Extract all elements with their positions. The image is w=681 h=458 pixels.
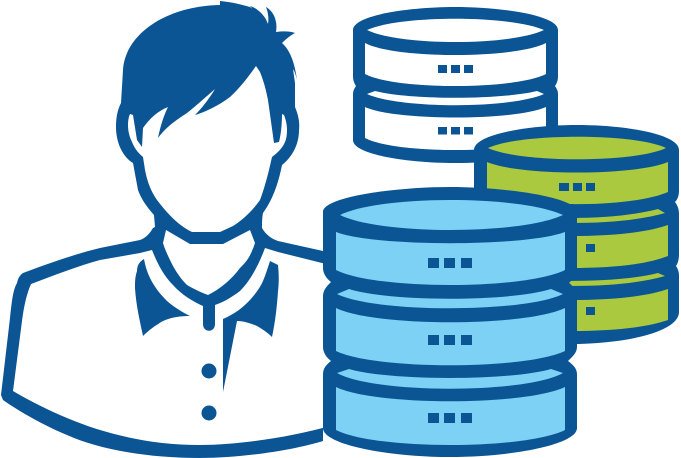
indicator lights [559, 183, 595, 315]
shirt body [13, 248, 330, 445]
top ellipse [340, 200, 563, 230]
shirt buttons [202, 364, 216, 420]
indicator lights [428, 258, 472, 423]
third drum [336, 387, 565, 445]
second drum [336, 308, 565, 365]
third lip sliver [566, 273, 665, 286]
third drum [570, 289, 668, 331]
second drum [570, 225, 668, 268]
top ellipse [488, 137, 666, 159]
neck [163, 230, 255, 295]
icon: green database stack [474, 125, 679, 344]
third lip sliver [337, 369, 563, 389]
white stack silhouette [353, 7, 558, 163]
icon: white database stack [353, 7, 558, 163]
person silhouette outline and hair [1, 1, 323, 458]
top ellipse [367, 19, 544, 42]
left collar [135, 259, 190, 336]
icon: person [1, 1, 330, 458]
second lip sliver [570, 209, 665, 223]
right collar [223, 261, 279, 392]
upper drum [365, 43, 546, 86]
top drum [336, 232, 565, 285]
green stack silhouette [474, 125, 679, 344]
icon: blue database stack [323, 187, 577, 457]
indicator lights [438, 65, 473, 134]
second lip sliver [337, 289, 563, 308]
blue stack silhouette [323, 187, 577, 457]
face [128, 66, 287, 232]
lower drum [365, 107, 546, 150]
upper drum [487, 162, 668, 204]
lip sliver [367, 91, 544, 105]
